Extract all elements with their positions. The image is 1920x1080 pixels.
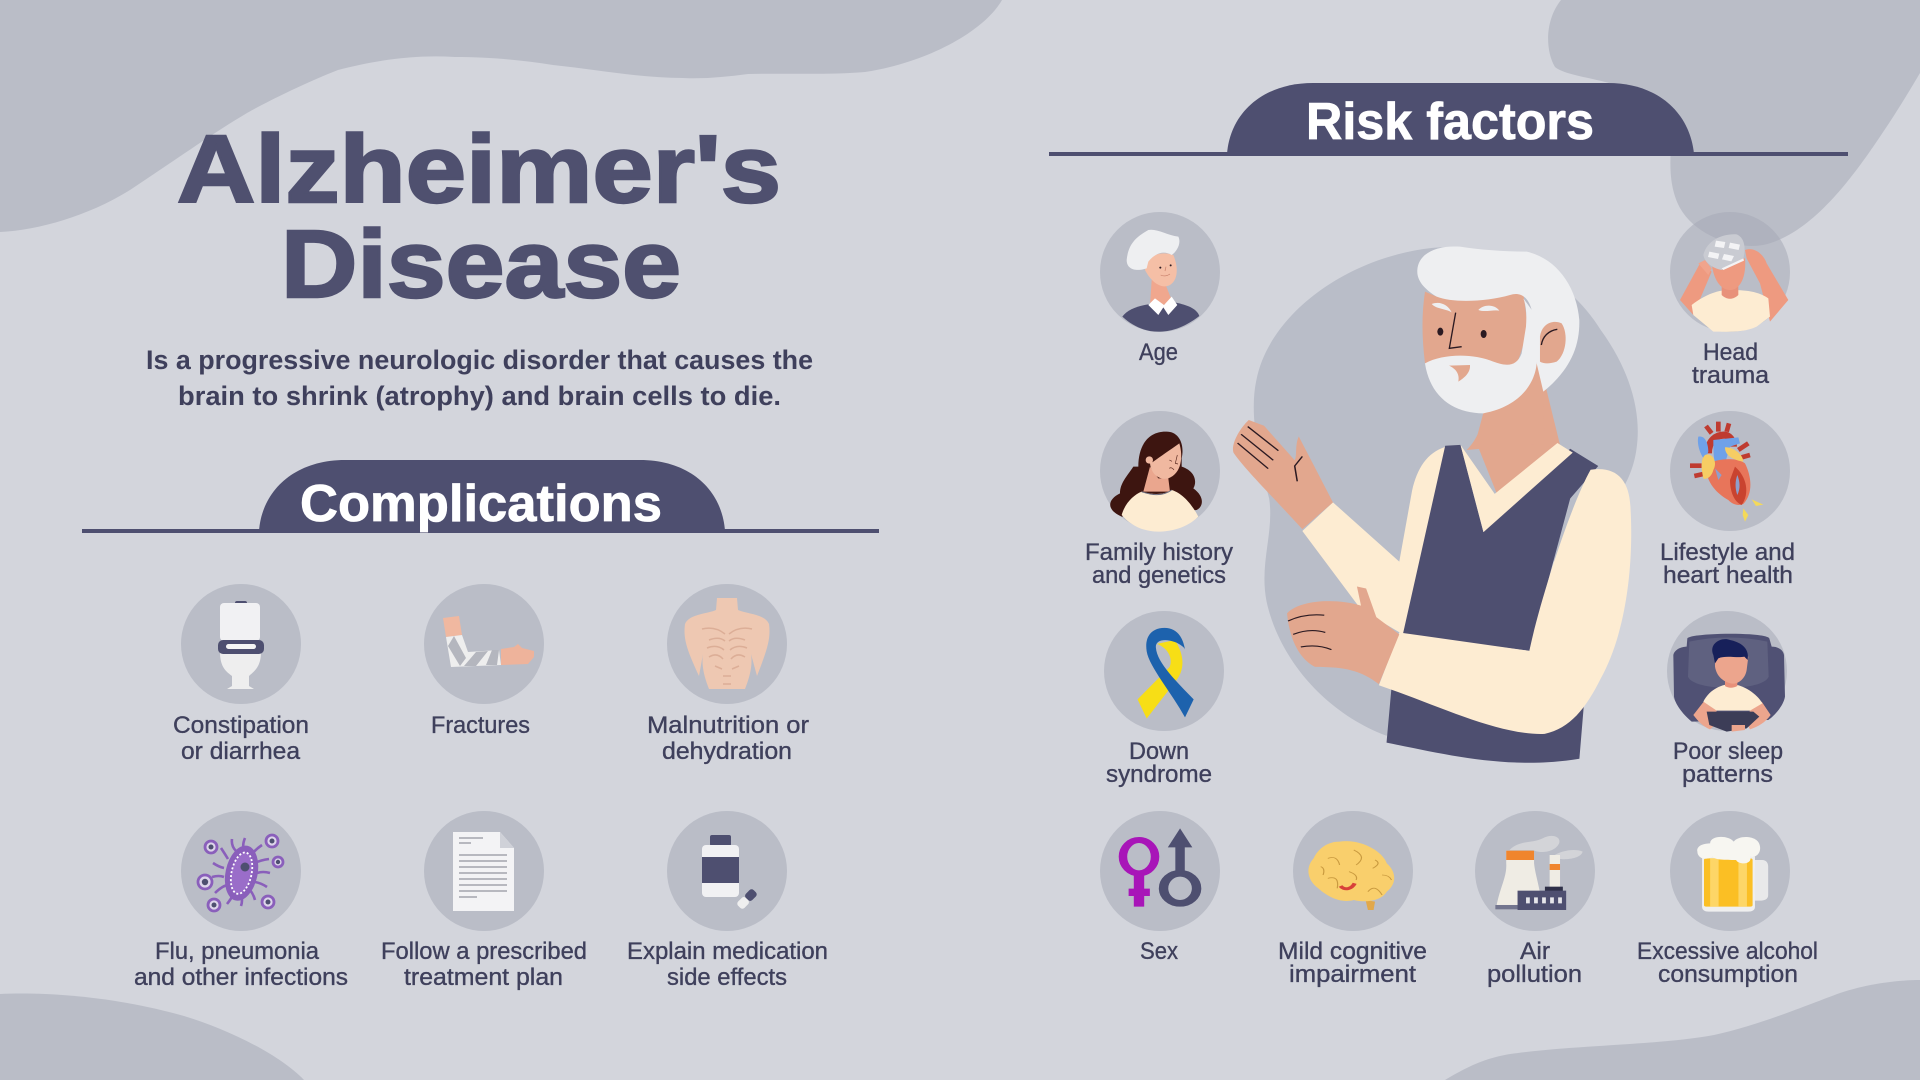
risk item: air pollution: pollution [1487,961,1582,988]
complications item: infections: and other infections [134,964,348,991]
man's body and backdrop [1233,247,1638,763]
risk item: lifestyle and heart health: Lifestyle and [1660,539,1795,566]
icon: person awake on sofa [1673,634,1785,732]
icon: person with bandaged head [1680,234,1788,332]
risk item: poor sleep: Poor sleep [1673,738,1783,765]
risk item: lifestyle and heart health [1660,411,1795,589]
icon: thin torso [685,598,770,689]
icon: gender symbols [1123,828,1197,907]
heading: complications [82,460,879,533]
risk item: age [1100,212,1220,366]
complications item: medication: side effects [667,964,787,991]
risk item: sex [1100,811,1220,965]
risk item: head trauma: Head [1703,339,1758,366]
icon: virus [198,835,283,911]
complications item: fractures: Fractures [431,712,530,739]
risk item: poor sleep: patterns [1682,761,1773,788]
icon: brain [1308,841,1394,910]
risk item: alcohol: consumption [1658,961,1798,988]
title: Disease [281,211,681,318]
complications item: treatment plan [381,811,587,991]
complications item: treatment plan: Follow a prescribed [381,938,587,965]
icon: bandaged arm [443,616,534,667]
risk item: mild cognitive impairment: Mild cognitive [1278,938,1427,965]
complications item: constipation: Constipation [173,712,309,739]
heading: complications: Complications [300,475,662,533]
icon: pill bottle [702,835,758,910]
title [177,116,781,318]
risk item: family history: Family history [1085,539,1233,566]
icon: toilet [218,601,264,689]
risk item: age: Age [1139,339,1178,366]
heading: risk factors [1049,83,1848,156]
complications item: constipation [173,584,309,765]
risk item: family history: and genetics [1092,562,1226,589]
icon: woman with dark hair [1110,432,1202,532]
risk item: head trauma [1670,212,1790,389]
risk item: down syndrome: syndrome [1106,761,1212,788]
icon: beer mug [1697,837,1768,912]
heading: risk factors: Risk factors [1306,93,1594,151]
complications item: infections [134,811,348,991]
complications item: infections: Flu, pneumonia [155,938,320,965]
risk item: down syndrome [1104,611,1224,788]
description text: Is a progressive neurologic disorder that causes the [146,345,813,375]
risk item: mild cognitive impairment [1278,811,1427,988]
risk item: poor sleep [1667,611,1787,788]
risk item: air pollution [1475,811,1595,988]
risk item: head trauma: trauma [1692,362,1770,389]
description text [146,345,813,411]
risk item: alcohol [1637,811,1818,988]
description text: brain to shrink (atrophy) and brain cells to die. [178,381,781,411]
icon: factory [1495,836,1583,910]
central illustration: elderly man [1233,246,1638,763]
risk item: lifestyle and heart health: heart health [1663,562,1793,589]
complications item: fractures [424,584,544,739]
icon: document [453,832,514,911]
complications item: malnutrition: dehydration [662,738,792,765]
risk item: down syndrome: Down [1129,738,1189,765]
complications item: medication: Explain medication [627,938,828,965]
complications item: malnutrition [647,584,809,765]
icon: awareness ribbon [1138,628,1194,719]
complications item: malnutrition: Malnutrition or [647,712,809,739]
complications item: medication [627,811,828,991]
risk item: alcohol: Excessive alcohol [1637,938,1818,965]
complications item: treatment plan: treatment plan [404,964,563,991]
complications item: constipation: or diarrhea [181,738,301,765]
title: Alzheimer's [177,116,781,223]
risk item: family history [1085,411,1233,589]
icon: elderly person [1122,230,1199,332]
risk item: sex: Sex [1140,938,1178,965]
man's head [1417,246,1579,450]
risk item: air pollution: Air [1520,938,1550,965]
risk item: mild cognitive impairment: impairment [1289,961,1416,988]
icon: anatomical heart [1690,422,1763,522]
